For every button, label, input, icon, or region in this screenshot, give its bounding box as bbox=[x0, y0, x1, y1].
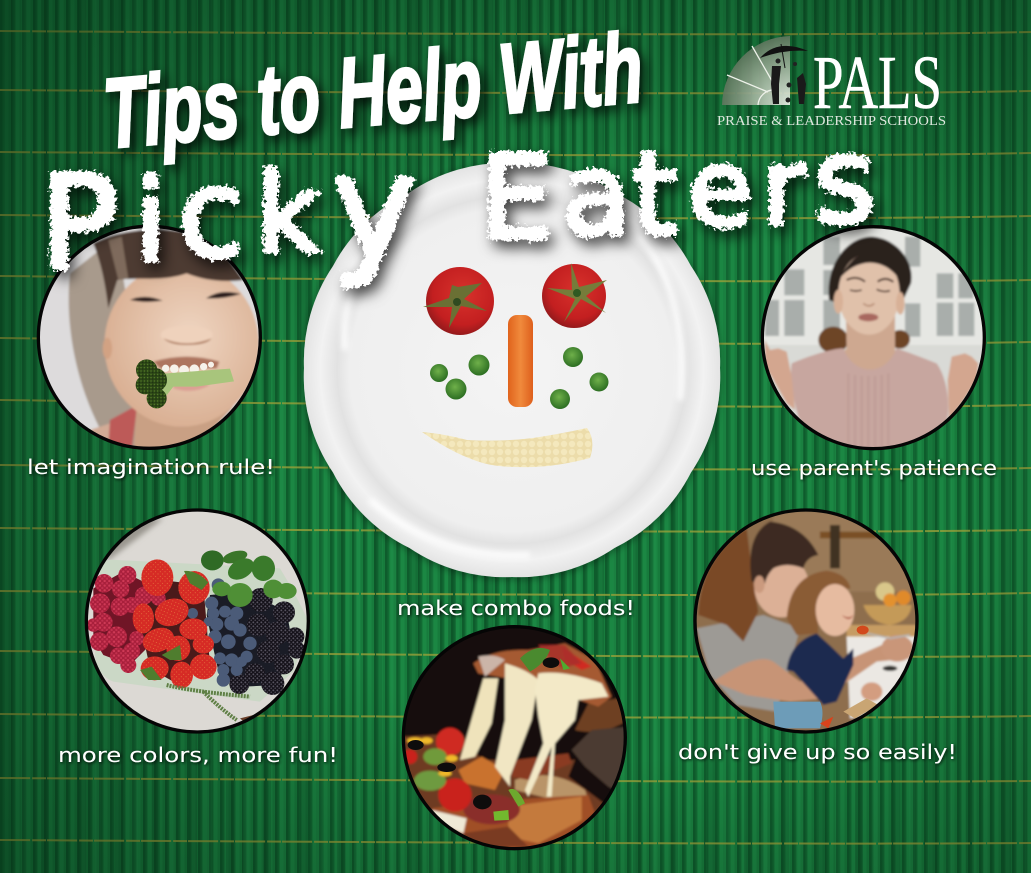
logo fan and umbrella figures bbox=[722, 36, 808, 105]
logo: PALS Praise &amp; Leadership Schools bbox=[717, 36, 946, 129]
photo: woman breathing calmly bbox=[760, 225, 986, 450]
heading: Picky Eaters: c bbox=[178, 146, 244, 285]
photo: dish of mixed berries bbox=[84, 508, 310, 734]
heading: Picky Eaters: k bbox=[256, 150, 320, 278]
caption: don't give up so easily!: don't give up so easily! bbox=[678, 740, 957, 764]
heading: Picky Eaters: s bbox=[814, 112, 875, 250]
heading: Picky Eaters: e bbox=[688, 128, 753, 250]
photo: mother feeding smiling child bbox=[693, 508, 919, 734]
carrot nose bbox=[508, 315, 533, 407]
left tomato eye bbox=[423, 267, 494, 335]
heading: Picky Eaters: t bbox=[632, 128, 677, 262]
heading: Picky Eaters: i bbox=[135, 157, 166, 287]
plate bbox=[304, 163, 720, 577]
heading: Picky Eaters: a bbox=[562, 131, 631, 261]
heading: Picky Eaters: P bbox=[40, 147, 118, 299]
caption: use parent's patience: use parent's patience bbox=[751, 456, 997, 480]
baby corn mouth bbox=[422, 428, 592, 467]
caption: make combo foods!: make combo foods! bbox=[397, 596, 635, 620]
heading: Picky Eaters: r bbox=[762, 127, 806, 249]
heading: Picky Eaters: y bbox=[332, 125, 416, 290]
caption: more colors, more fun!: more colors, more fun! bbox=[58, 743, 338, 767]
photo: girl biting broccoli bbox=[36, 224, 262, 450]
plate with vegetable face bbox=[304, 163, 720, 577]
logo tagline: PRAISE & LEADERSHIP SCHOOLS bbox=[717, 114, 946, 129]
peas bbox=[430, 347, 608, 409]
logo wordmark: PALS bbox=[813, 41, 942, 125]
caption: let imagination rule!: let imagination rule! bbox=[27, 455, 275, 479]
heading: Picky Eaters: E bbox=[480, 132, 553, 266]
right tomato eye bbox=[542, 263, 607, 328]
photo: melted cheese pizza slice bbox=[402, 625, 627, 850]
